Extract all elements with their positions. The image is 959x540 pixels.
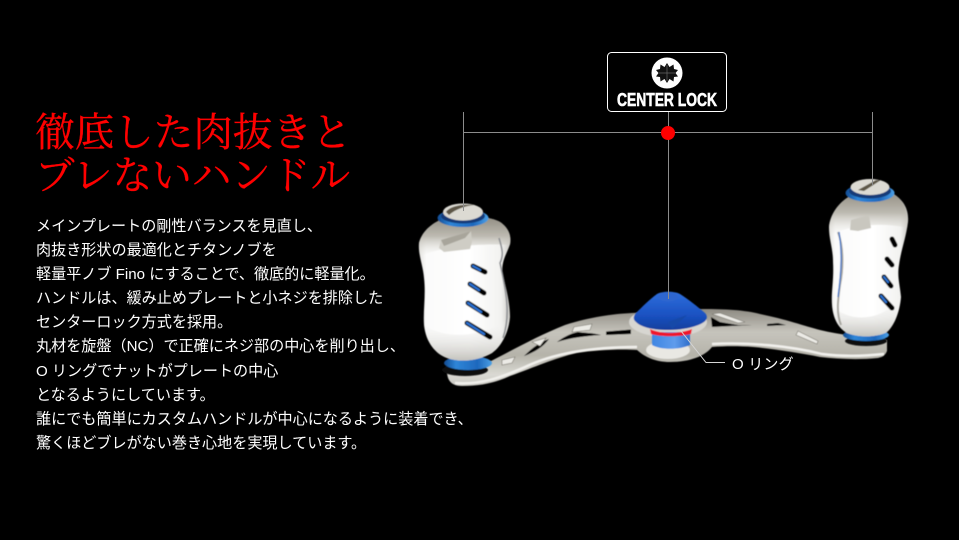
body text: 丸材を旋盤（NC）で正確にネジ部の中心を削り出し、 [36, 338, 405, 355]
body text: O リングでナットがプレートの中心 [36, 363, 278, 380]
badge label: CENTER LOCK [617, 90, 717, 110]
right knob [829, 179, 908, 346]
icon: center lock star [652, 58, 682, 88]
body text: 肉抜き形状の最適化とチタンノブを [36, 242, 277, 259]
right arm cutouts [711, 317, 786, 327]
arm lower highlight [455, 343, 884, 383]
blue cylinder [652, 332, 690, 349]
right knob slots [881, 239, 895, 308]
left knob cap [438, 204, 488, 227]
left knob [419, 204, 510, 376]
body text: 軽量平ノブ Fino にすることで、徹底的に軽量化。 [36, 266, 375, 283]
body text: となるようにしています。 [36, 387, 215, 404]
left arm cutouts [524, 330, 631, 356]
body text: 誰にでも簡単にカスタムハンドルが中心になるように装着でき、 [36, 411, 473, 428]
title: 徹底した肉抜きと [35, 111, 352, 155]
red center marker [661, 126, 675, 140]
left knob slots [467, 266, 490, 337]
right knob cap [846, 179, 894, 202]
body text [36, 218, 473, 452]
red o-ring [650, 329, 692, 336]
blue cone [634, 292, 707, 330]
title [35, 111, 352, 198]
right knob base [843, 329, 889, 346]
left knob base [442, 356, 492, 376]
title: ブレないハンドル [35, 154, 350, 198]
center lock nut [629, 292, 707, 359]
handle arm [447, 309, 887, 386]
body text: 驚くほどブレがない巻き心地を実現しています。 [36, 435, 366, 452]
arm highlights [502, 313, 818, 365]
o-ring callout [681, 331, 794, 373]
center lock badge [608, 52, 726, 112]
dimension lines [463, 111, 873, 299]
body text: センターロック方式を採用。 [36, 314, 232, 331]
body text: メインプレートの剛性バランスを見直し、 [36, 218, 322, 235]
o-ring label: O リング [732, 356, 794, 373]
body text: ハンドルは、緩み止めプレートと小ネジを排除した [36, 290, 383, 307]
